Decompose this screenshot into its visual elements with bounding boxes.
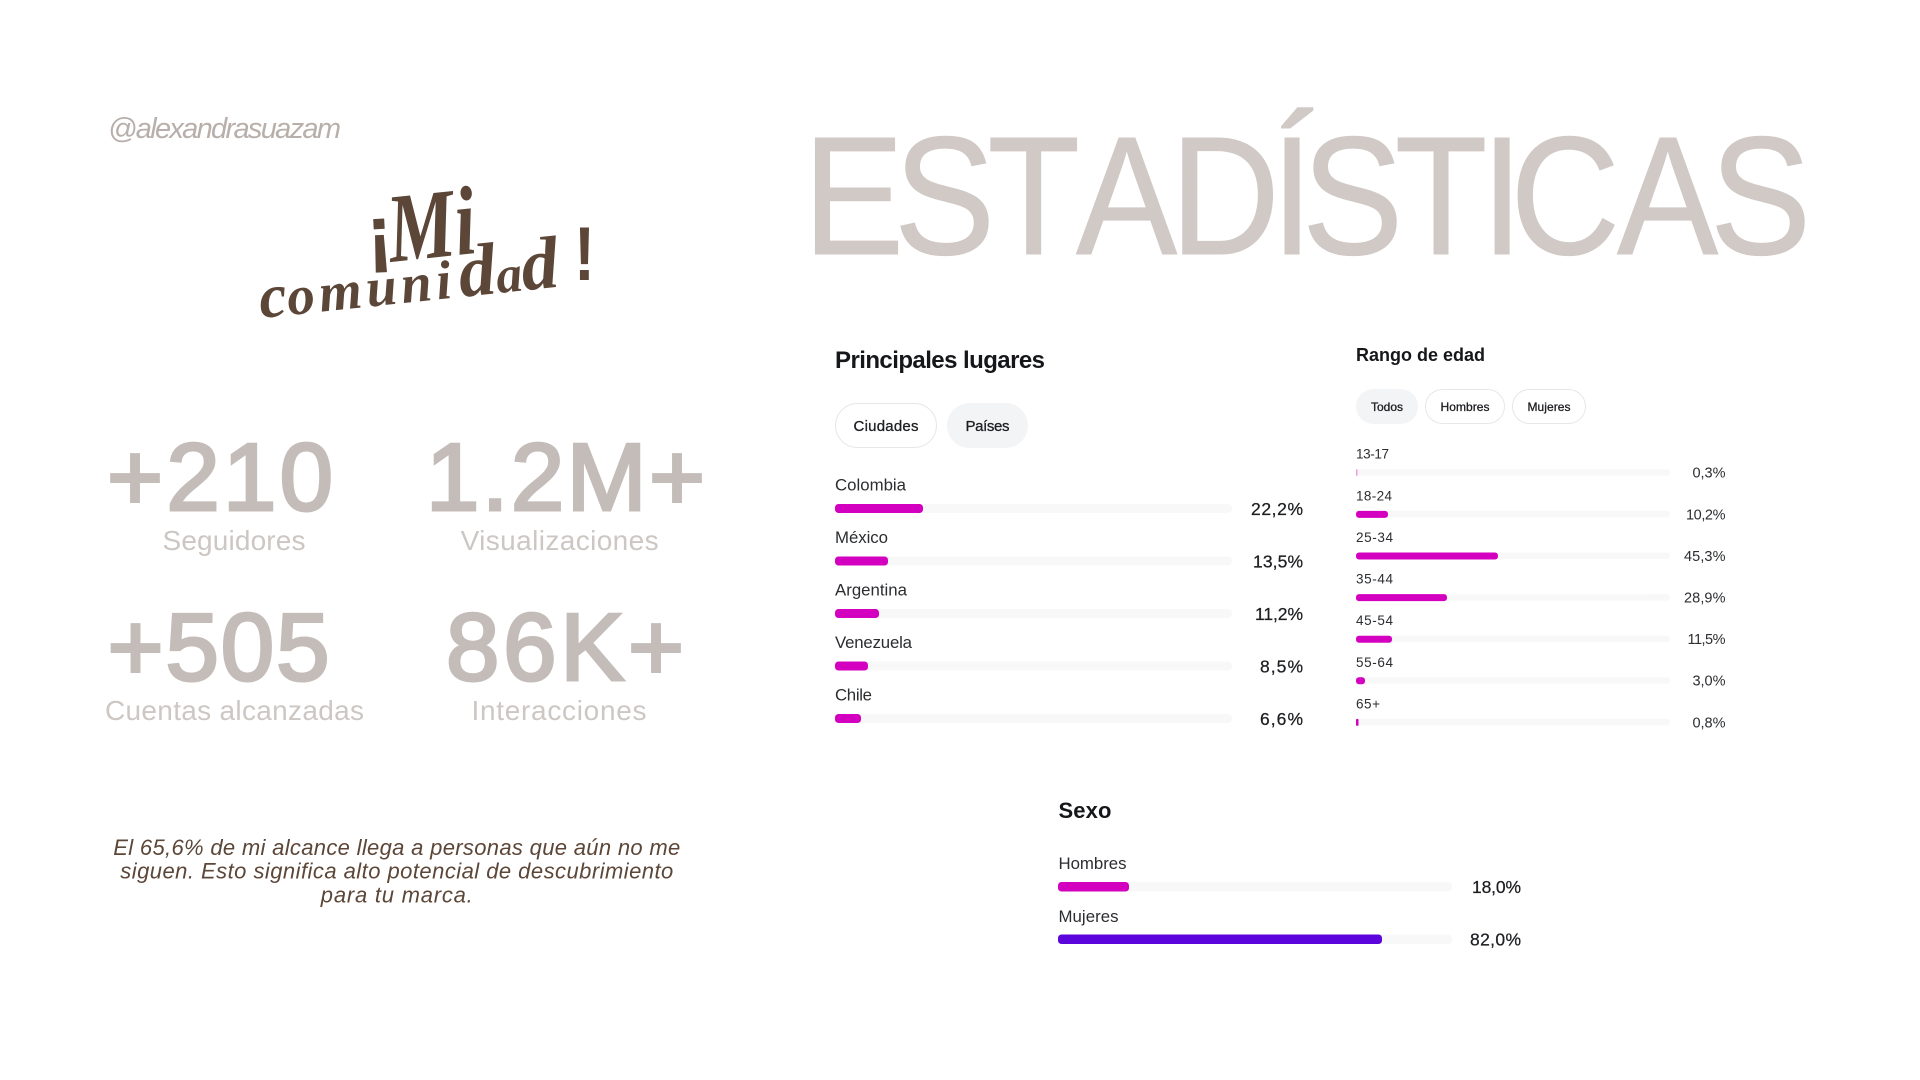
row: hombres: 18,0% xyxy=(1472,877,1521,897)
stat: visualizaciones: Visualizaciones xyxy=(461,525,659,556)
row: 45-54 xyxy=(1356,613,1726,648)
tab: hombres xyxy=(1426,390,1504,424)
heading: sexo: Sexo xyxy=(1058,798,1112,823)
row: 35-44 xyxy=(1356,572,1726,606)
row: chile: Chile xyxy=(835,686,872,704)
row: 55-64: 3,0% xyxy=(1692,674,1726,690)
row: mujeres xyxy=(1058,907,1521,950)
title: ESTADÍSTICAS xyxy=(803,102,1811,290)
tab: ciudades xyxy=(836,404,936,448)
stat: visualizaciones: 1.2M+ xyxy=(426,424,705,531)
row: argentina: 11,2% xyxy=(1255,604,1303,624)
row: chile xyxy=(835,686,1303,729)
row: 18-24: 18-24 xyxy=(1356,488,1392,503)
hand-lettered heading: a xyxy=(493,246,525,305)
hand-lettered heading: ! xyxy=(574,212,595,297)
row: hombres: Hombres xyxy=(1058,854,1126,873)
row: 35-44: 28,9% xyxy=(1684,590,1726,606)
tab: paises xyxy=(947,403,1028,448)
row: 18-24 xyxy=(1356,488,1726,523)
row: mujeres: 82,0% xyxy=(1470,930,1521,950)
row: 18-24: 10,2% xyxy=(1686,507,1726,523)
row: chile: 6,6% xyxy=(1260,709,1303,729)
hand-lettered heading: Mi xyxy=(380,167,481,284)
row: argentina xyxy=(835,580,1303,624)
tab: mujeres xyxy=(1512,390,1586,424)
row: 65+: 65+ xyxy=(1356,697,1380,712)
reach note: siguen. Esto significa alto potencial de descubrimiento xyxy=(120,858,673,884)
hand-lettered heading: d xyxy=(517,222,563,307)
hand-lettered heading: c xyxy=(255,261,290,332)
row: venezuela: Venezuela xyxy=(835,633,913,652)
row: 45-54: 45-54 xyxy=(1356,613,1393,628)
stat: seguidores: Seguidores xyxy=(162,525,306,556)
row: 13-17: 13-17 xyxy=(1356,447,1389,462)
hand-lettered heading xyxy=(254,167,595,335)
reach note xyxy=(113,835,680,908)
reach note: El 65,6% de mi alcance llega a personas que aún no me xyxy=(113,835,680,860)
row: 65+ xyxy=(1356,697,1726,731)
row: 25-34 xyxy=(1356,530,1726,565)
tab: mujeres: Mujeres xyxy=(1528,400,1570,414)
hand-lettered heading: omuni xyxy=(284,249,455,327)
stat: cuentas alcanzadas: +505 xyxy=(108,594,330,701)
row: 35-44: 35-44 xyxy=(1356,572,1393,586)
row: mexico xyxy=(835,528,1303,572)
handle: @alexandrasuazam xyxy=(108,113,341,145)
row: 45-54: 11,5% xyxy=(1688,632,1726,648)
row: 13-17: 0,3% xyxy=(1692,466,1726,482)
heading: principales lugares: Principales lugares xyxy=(835,347,1045,374)
panel: rango de edad xyxy=(1356,345,1726,731)
stat: cuentas alcanzadas xyxy=(105,594,364,726)
panel: sexo xyxy=(1058,798,1521,950)
stat: interacciones: Interacciones xyxy=(472,695,646,726)
stat: interacciones: 86K+ xyxy=(446,594,684,701)
row: colombia: 22,2% xyxy=(1251,499,1303,519)
row: 55-64 xyxy=(1356,655,1726,690)
row: colombia xyxy=(835,476,1303,519)
row: mujeres: Mujeres xyxy=(1058,907,1118,926)
hand-lettered heading: ¡ xyxy=(364,188,395,278)
stat: seguidores: +210 xyxy=(107,424,333,531)
row: venezuela: 8,5% xyxy=(1260,656,1303,676)
row: venezuela xyxy=(835,633,1303,676)
row: 13-17 xyxy=(1356,447,1726,482)
tab: todos xyxy=(1356,389,1418,424)
tab: ciudades: Ciudades xyxy=(854,418,918,435)
row: mexico: México xyxy=(835,528,888,547)
row: 55-64: 55-64 xyxy=(1356,655,1393,670)
stat: cuentas alcanzadas: Cuentas alcanzadas xyxy=(105,695,364,726)
heading: rango de edad: Rango de edad xyxy=(1356,345,1485,365)
reach note: para tu marca. xyxy=(320,882,473,908)
row: argentina: Argentina xyxy=(835,580,908,600)
row: mexico: 13,5% xyxy=(1253,552,1303,572)
row: 25-34: 45,3% xyxy=(1684,549,1726,565)
tab: todos: Todos xyxy=(1371,400,1403,414)
row: 65+: 0,8% xyxy=(1692,715,1726,731)
row: hombres xyxy=(1058,854,1521,897)
tab: hombres: Hombres xyxy=(1440,400,1490,414)
hand-lettered heading: d xyxy=(454,228,500,314)
tab: paises: Países xyxy=(966,418,1010,435)
panel: principales lugares xyxy=(835,347,1303,729)
row: colombia: Colombia xyxy=(835,476,907,494)
row: 25-34: 25-34 xyxy=(1356,530,1393,545)
